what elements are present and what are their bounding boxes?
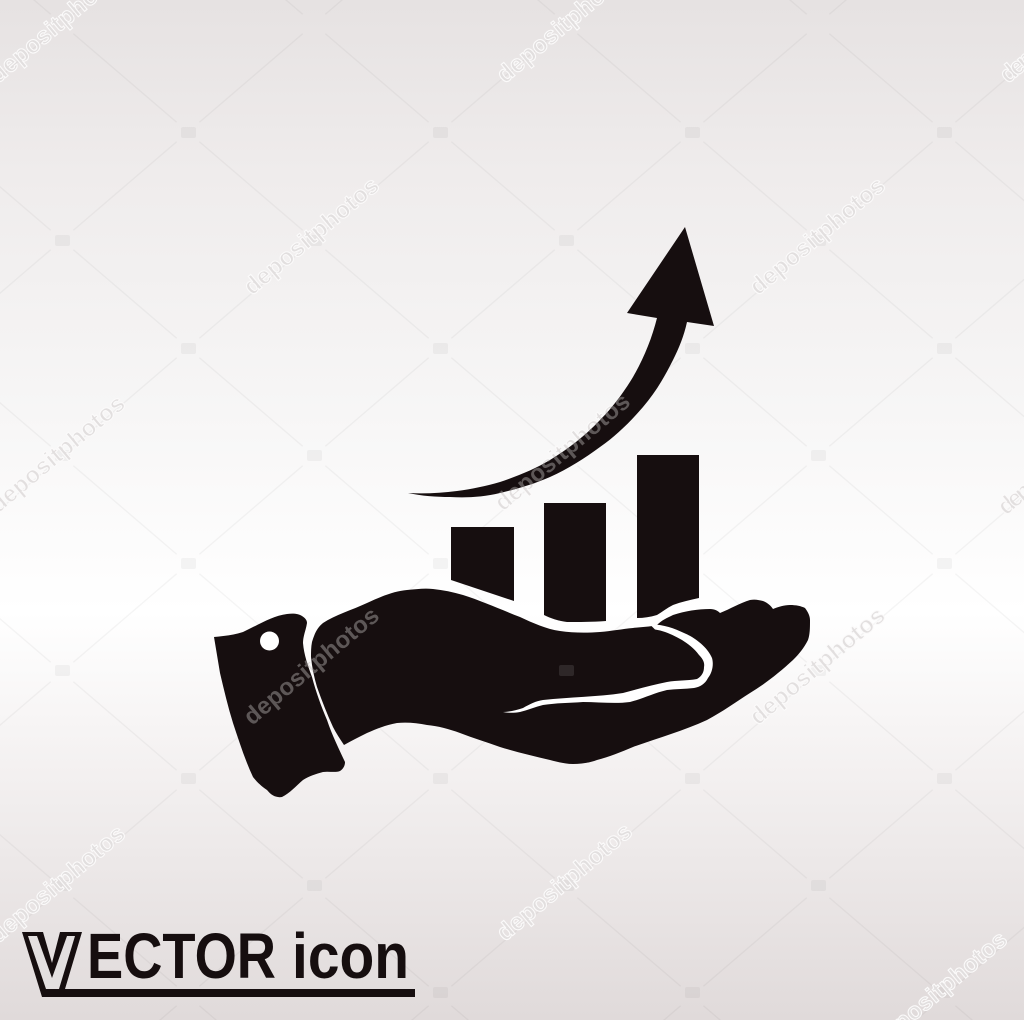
cuff button bbox=[260, 632, 279, 650]
watermark text over the icon shapes: depositphotos bbox=[490, 388, 636, 517]
logo: VECTOR icon bbox=[22, 920, 415, 997]
watermark text repeated across the page: depositphotos bbox=[745, 602, 891, 731]
bar chart bbox=[451, 455, 699, 622]
icon: rising arrow bbox=[408, 227, 714, 497]
logo wordmark: ECTOR bbox=[87, 920, 276, 992]
icon: shirt cuff bbox=[214, 614, 345, 797]
watermark text repeated across the page: depositphotos bbox=[239, 602, 385, 731]
watermark text repeated across the page: depositphotos bbox=[492, 818, 638, 947]
watermark text repeated across the page: depositphotos bbox=[490, 388, 636, 517]
bar 2 bbox=[544, 503, 606, 622]
watermark text repeated across the page: depositphotos bbox=[745, 172, 891, 301]
watermark text over the icon shapes bbox=[239, 388, 636, 731]
watermark camera marks bbox=[55, 127, 952, 998]
bar 1 bbox=[451, 527, 514, 601]
thumb outline bbox=[503, 624, 713, 713]
logo: VECTOR icon: icon bbox=[292, 920, 409, 992]
watermark camera on the palm bbox=[559, 665, 574, 676]
cuff shape bbox=[214, 614, 345, 797]
watermark text over the icon shapes: depositphotos bbox=[239, 602, 385, 731]
watermark text repeated across the page: depositphotos bbox=[239, 172, 385, 301]
bar 3 bbox=[637, 455, 699, 618]
hand silhouette bbox=[311, 589, 810, 764]
logo outlined V and underline bbox=[22, 932, 415, 997]
icon: open hand bbox=[311, 589, 810, 764]
